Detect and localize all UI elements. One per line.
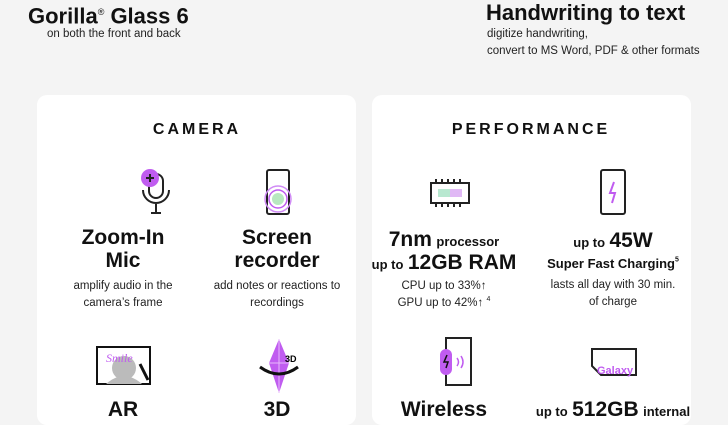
feature: charging: up to 45W	[573, 229, 653, 252]
feature: screen recorder	[214, 226, 340, 309]
text: front and back: on both the front and back	[47, 28, 181, 40]
text: handwriting desc: convert to MS Word, PDF & other formats	[487, 45, 700, 57]
icon: AR doodle	[96, 346, 151, 385]
panel: performance	[372, 95, 691, 425]
icon: mic	[141, 169, 170, 214]
feature: processor: up to 12GB RAM	[372, 251, 516, 274]
feature: screen recorder: recordings	[250, 297, 304, 309]
feature: processor: GPU up to 42%↑ 4	[398, 296, 490, 309]
feature: screen recorder: recorder	[234, 249, 320, 272]
feature: storage: up to 512GB internal	[536, 398, 690, 421]
feature: 3D: 3D	[264, 398, 290, 421]
feature: zoom-in mic: Mic	[105, 249, 140, 272]
feature: zoom-in mic: camera’s frame	[83, 297, 163, 309]
text: handwriting desc: digitize handwriting,	[487, 28, 588, 40]
feature: processor: 7nm processor	[389, 228, 499, 251]
feature: AR: AR	[108, 398, 138, 421]
icon: 3D: 3D	[285, 354, 297, 364]
text: handwriting desc	[487, 28, 700, 57]
feature: charging: Super Fast Charging5	[547, 256, 679, 271]
panel: camera	[37, 95, 356, 425]
feature: zoom-in mic: Zoom-In	[82, 226, 164, 249]
icon: storage card: Galaxy	[597, 365, 634, 377]
icon: wireless powershare	[440, 337, 472, 386]
panel title: camera: CAMERA	[153, 121, 241, 138]
heading: handwriting: Handwriting to text	[486, 0, 685, 25]
feature: processor: CPU up to 33%↑	[401, 280, 486, 292]
panel title: performance: PERFORMANCE	[452, 121, 610, 138]
feature: screen recorder: Screen	[242, 226, 312, 249]
feature: charging: of charge	[589, 296, 637, 308]
icon: screen recorder	[264, 169, 292, 215]
icon: 3D	[259, 339, 299, 393]
heading: gorilla glass: Gorilla® Glass 6	[28, 3, 189, 28]
feature: zoom-in mic	[73, 226, 173, 309]
feature: wireless: Wireless	[401, 398, 487, 421]
icon: storage card	[591, 348, 637, 377]
icon: AR doodle: Smile	[106, 351, 133, 365]
feature: charging: lasts all day with 30 min.	[551, 279, 675, 291]
feature: zoom-in mic: amplify audio in the	[73, 280, 173, 292]
icon: charging phone	[600, 169, 626, 215]
feature: screen recorder: add notes or reactions to	[214, 280, 340, 292]
icon: processor	[430, 179, 470, 207]
feature: charging	[547, 229, 679, 308]
feature: processor	[372, 228, 516, 309]
